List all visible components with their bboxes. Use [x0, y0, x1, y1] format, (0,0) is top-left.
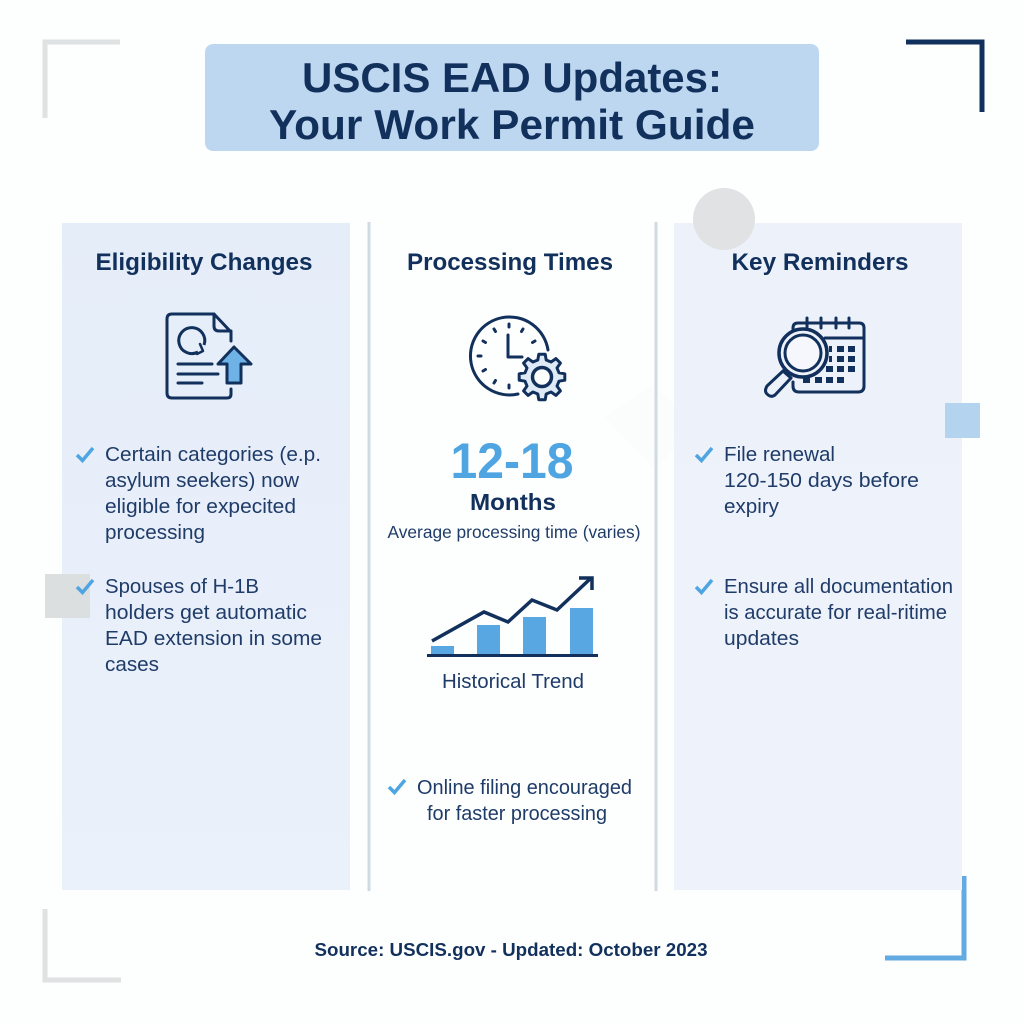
bullet text: online filing: for faster processing — [427, 802, 607, 825]
corner bracket: bottom left — [45, 909, 121, 980]
panel: processing times — [388, 249, 640, 825]
bullet text: asylum seekers: asylum seekers) now — [105, 469, 299, 492]
heading: eligibility changes: Eligibility Changes — [96, 249, 312, 276]
bullet text: spouses: cases — [105, 653, 159, 676]
bullet text: asylum seekers: processing — [105, 521, 205, 544]
corner bracket: bottom right — [885, 876, 964, 958]
decorative square — [945, 403, 980, 438]
bullet text: documentation: updates — [724, 627, 799, 650]
caption: Average processing time (varies) — [388, 522, 640, 542]
bullet text: spouses: EAD extension in some — [105, 627, 322, 650]
bullet check — [77, 580, 93, 592]
bullet check — [696, 580, 712, 592]
bullet text: documentation: is accurate for real-ritime — [724, 601, 947, 624]
bullet text: file renewal: File renewal — [724, 443, 835, 466]
bullet text: file renewal — [724, 443, 919, 518]
source footer: Source: USCIS.gov - Updated: October 2023 — [314, 940, 708, 960]
bullet text: asylum seekers — [105, 443, 321, 544]
bullet text: spouses — [105, 575, 322, 676]
bullet check — [77, 448, 93, 460]
bullet check — [389, 780, 405, 792]
icon: document with upload arrow — [167, 314, 251, 398]
faint diamond — [605, 385, 700, 468]
chart caption: Historical Trend — [442, 671, 584, 693]
column dividers — [369, 222, 656, 891]
decorative square — [45, 574, 90, 618]
corner bracket: top left — [45, 42, 120, 118]
panel: eligibility changes — [45, 223, 350, 890]
heading: key reminders: Key Reminders — [732, 249, 908, 276]
bullet text: file renewal: 120-150 days before — [724, 469, 919, 492]
big number: 12-18 — [450, 433, 574, 489]
bullet text: online filing: Online filing encouraged — [417, 776, 632, 799]
bullet text: spouses: Spouses of H-1B — [105, 575, 259, 598]
heading: processing times: Processing Times — [407, 249, 613, 276]
bullet check — [696, 448, 712, 460]
icon: clock with gear — [470, 317, 565, 400]
title: Your Work Permit Guide — [269, 101, 755, 148]
bullet text: spouses: holders get automatic — [105, 601, 307, 624]
bullet text: asylum seekers: eligible for expecited — [105, 495, 296, 518]
decorative circle — [693, 188, 755, 250]
months label: Months — [470, 489, 556, 515]
bullet text: file renewal: expiry — [724, 495, 780, 518]
corner bracket: top right — [906, 42, 982, 112]
trend chart — [427, 578, 598, 656]
bullet text: online filing — [417, 776, 632, 825]
title — [205, 44, 819, 151]
bullet text: documentation: Ensure all documentation — [724, 575, 953, 598]
icon: calendar and magnifier — [766, 318, 864, 396]
title: USCIS EAD Updates: — [302, 54, 722, 101]
panel: key reminders — [674, 223, 962, 890]
bullet text: documentation — [724, 575, 953, 650]
bullet text: asylum seekers: Certain categories (e.p. — [105, 443, 321, 466]
